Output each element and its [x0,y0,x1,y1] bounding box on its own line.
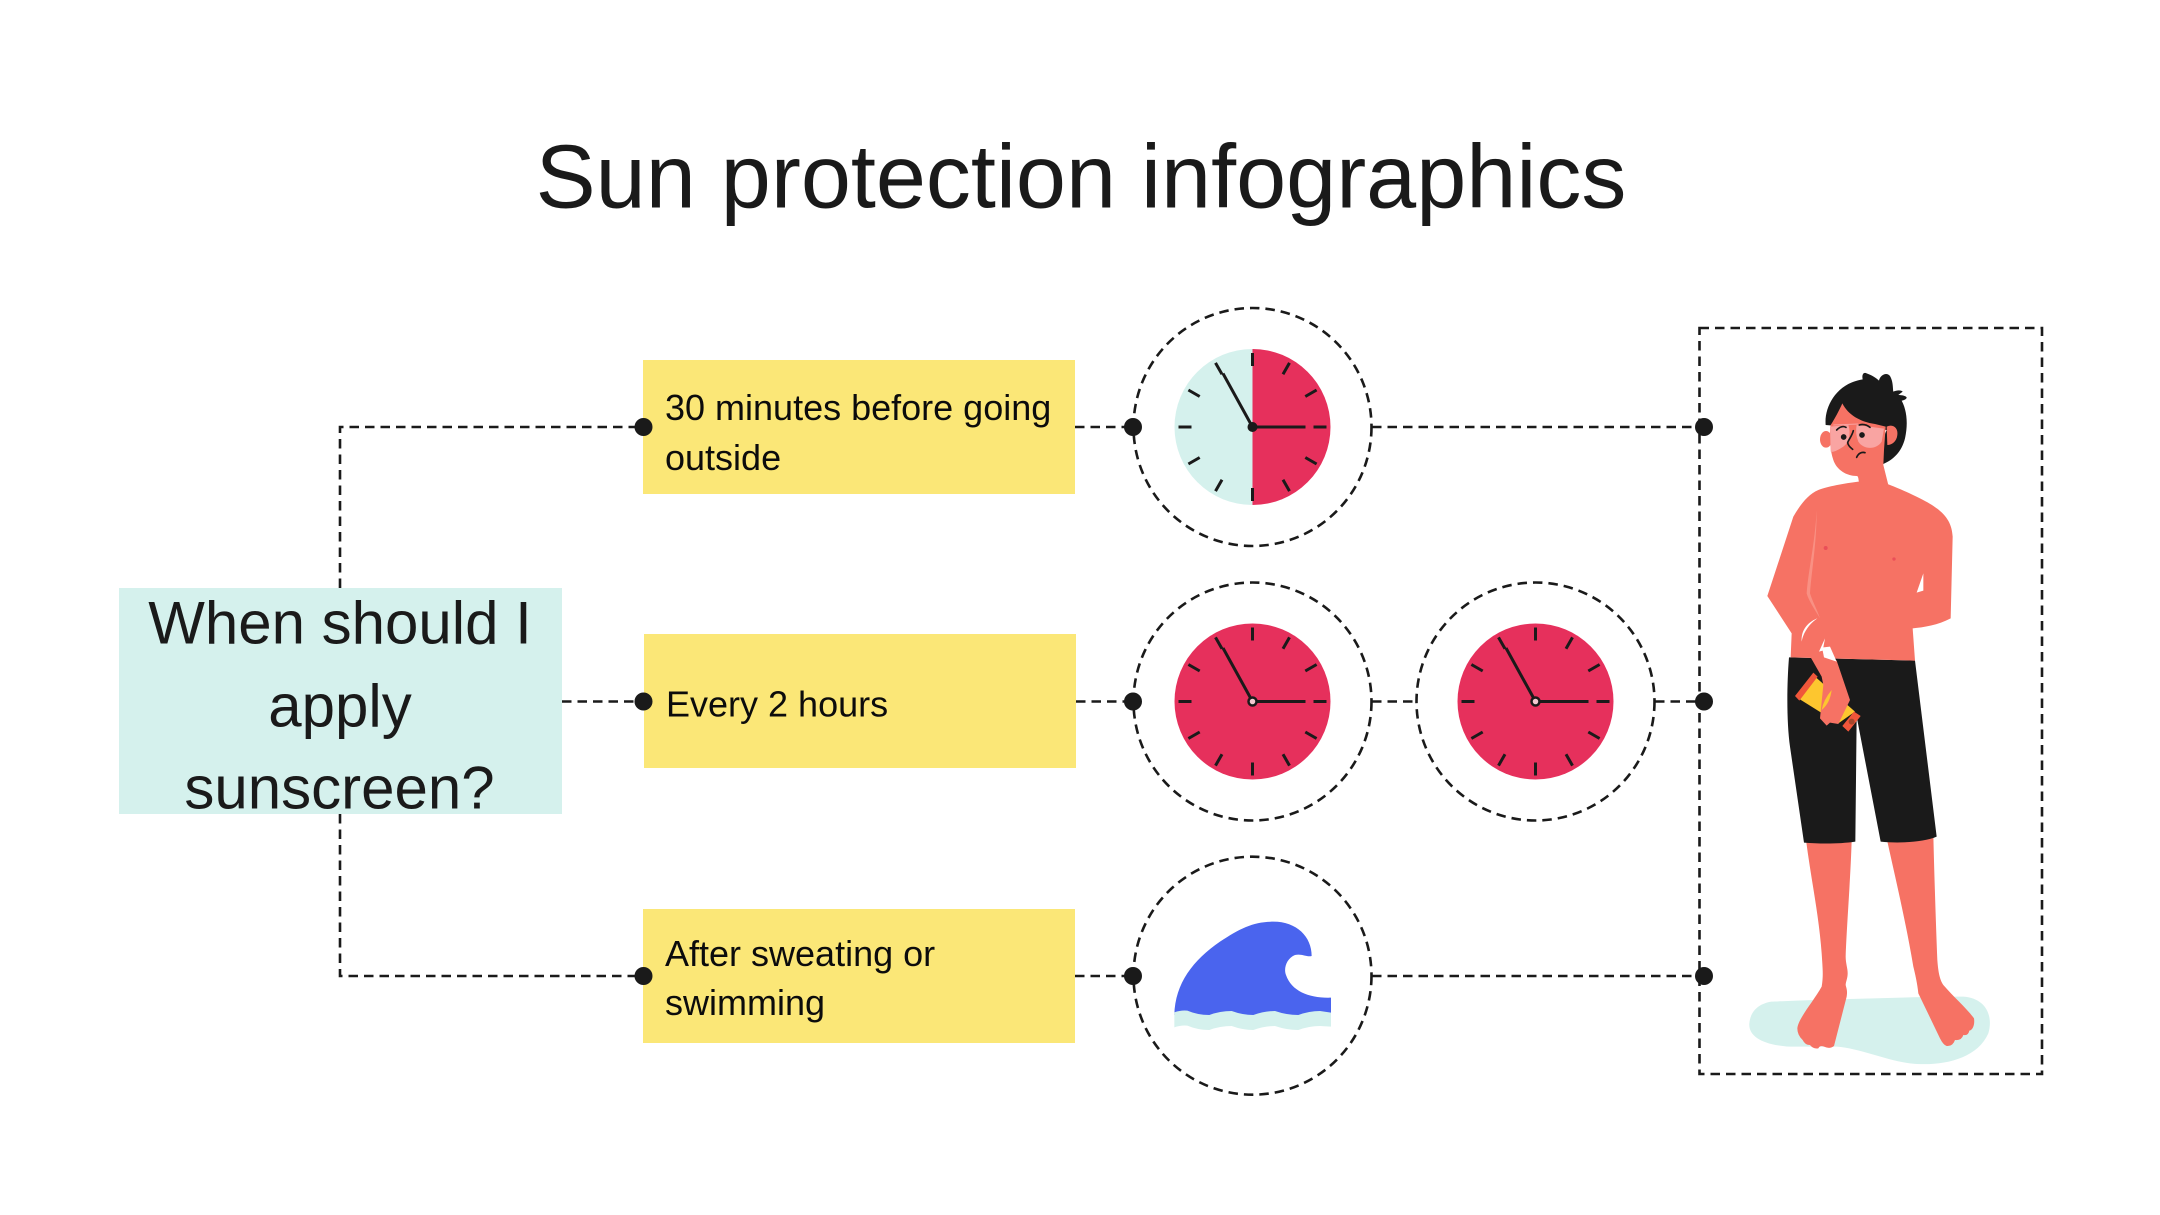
icon: full clock one [1134,582,1372,820]
legs [1797,840,1852,1049]
icon: half clock [1134,308,1372,546]
icon: full clock two [1416,582,1654,820]
sunglass tan [1830,425,1850,452]
ears [1820,431,1832,448]
arm creases [1802,618,1817,642]
text: 30 minutes before going outside: 30 minutes before going [665,387,1051,428]
heading: question: When should I [148,590,532,656]
text: every 2 hours: Every 2 hours [666,684,888,724]
text: after sweating or swimming: After sweating or [665,933,935,974]
text: 30 minutes before going outside: outside [665,437,781,478]
heading: question: apply [268,672,412,740]
wrist and hand [1809,650,1850,726]
face features [1837,425,1870,457]
icon: wave [1134,857,1372,1095]
bottle [1798,677,1855,723]
connector lines [340,427,1704,976]
arm gap [1917,573,1923,593]
title: Sun protection infographics [536,128,1626,228]
face and neck [1830,403,1888,485]
nipples [1824,546,1828,550]
puddle shadow [1749,997,1990,1064]
heading: question: sunscreen? [184,754,495,822]
connector dots [634,418,1713,985]
panel: every 2 hours [644,634,1076,768]
arm highlight [1807,510,1820,618]
panel: person frame [1700,328,2042,1074]
torso and arms [1767,482,1953,661]
text: after sweating or swimming: swimming [665,982,825,1023]
panel: after sweating [643,909,1075,1043]
hair [1826,373,1907,464]
shorts [1787,657,1937,844]
panel: 30 minutes [643,360,1075,494]
illustration: sunburned man with sunscreen [1749,373,1990,1064]
panel: question box [119,588,562,822]
